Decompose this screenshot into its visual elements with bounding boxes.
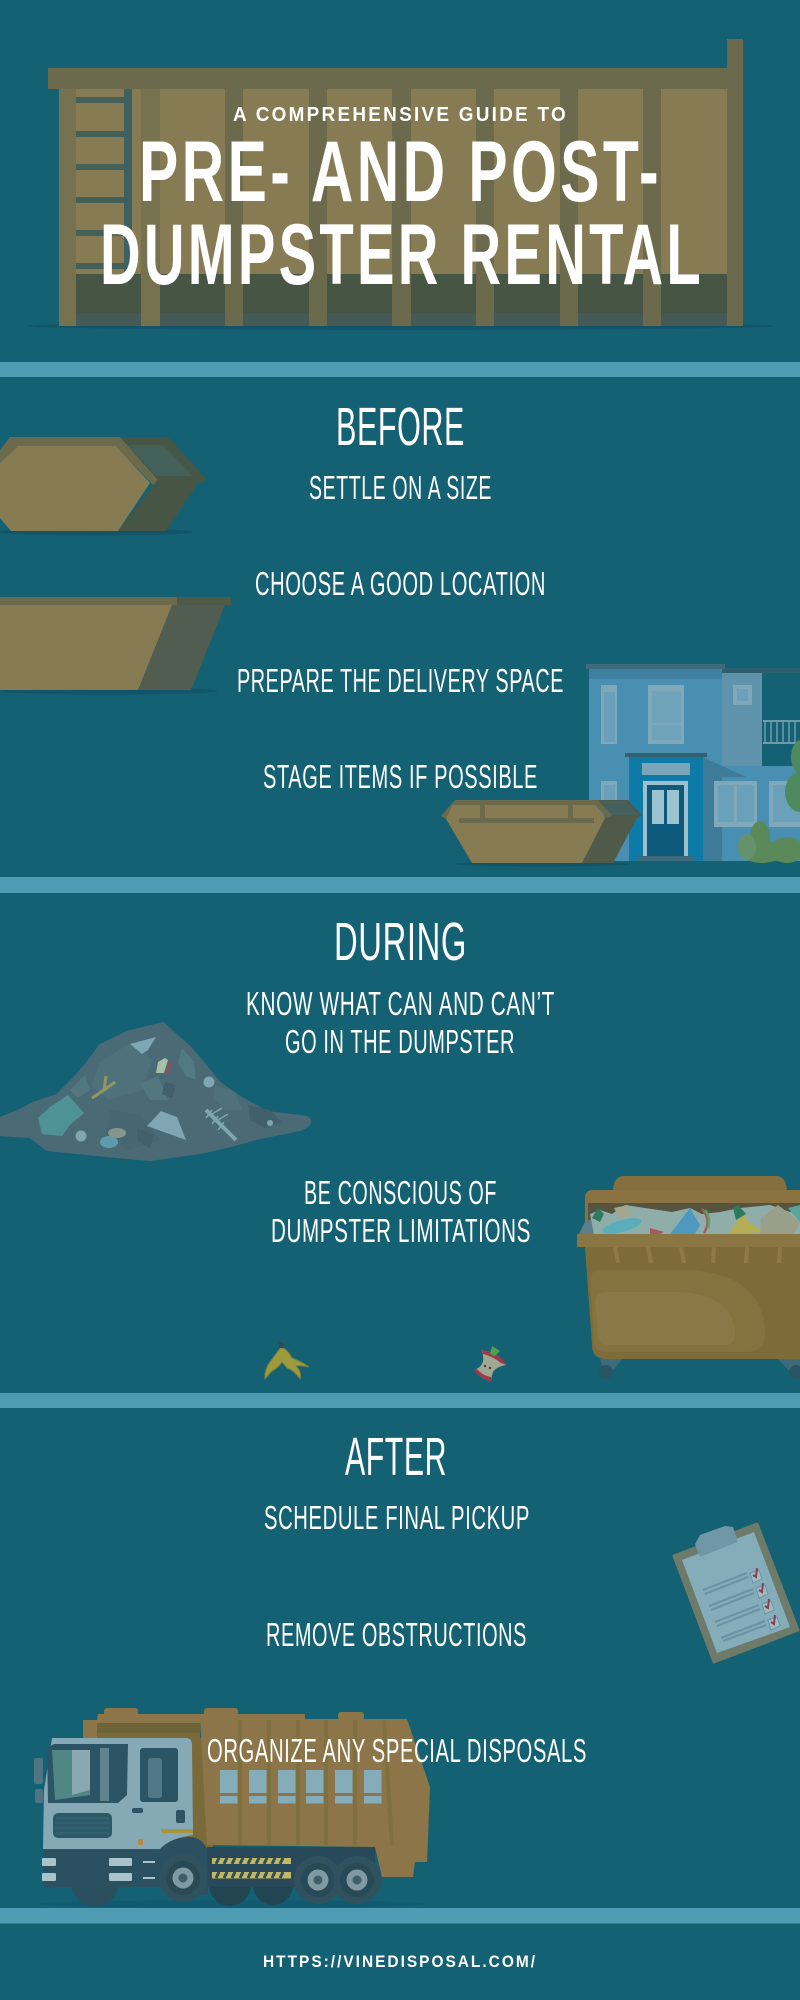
step: settle on a size: SETTLE ON A SIZE: [309, 470, 492, 507]
truck rear compactor: [83, 1708, 430, 1877]
icon: dumpster beside house: [441, 800, 642, 866]
truck wheels: [159, 1854, 381, 1904]
step: know what can go: [246, 986, 555, 1061]
house windows: [601, 685, 800, 827]
icon: garbage pile: [0, 1023, 310, 1160]
title block: A COMPREHENSIVE GUIDE TO: [233, 104, 568, 126]
panel: after: [34, 1427, 798, 1908]
truck windows: [220, 1770, 382, 1804]
checkboxes: [750, 1568, 780, 1630]
panel: during: [0, 912, 800, 1381]
step: know what can go: GO IN THE DUMPSTER: [285, 1024, 515, 1061]
icon: clipboard checklist: [674, 1524, 798, 1662]
step: know what can go: KNOW WHAT CAN AND CAN’T: [246, 986, 555, 1023]
step: schedule final pickup: SCHEDULE FINAL PICKUP: [264, 1500, 530, 1537]
front entry: [625, 753, 707, 861]
step: be conscious of limitations: DUMPSTER LIMITATIONS: [271, 1213, 531, 1250]
icon: full dumpster bin: [577, 1176, 800, 1379]
bushes: [738, 740, 800, 863]
icon: house: [586, 664, 800, 863]
hazard stripes: [212, 1858, 291, 1878]
icon: large skip dumpster: [0, 597, 231, 694]
icon: banana peel: [265, 1342, 309, 1379]
heading: after: AFTER: [345, 1427, 447, 1487]
step: be conscious of limitations: BE CONSCIOUS OF: [304, 1175, 497, 1212]
title block: [100, 104, 704, 303]
checklist lines: [703, 1573, 766, 1641]
truck lights: [42, 1858, 155, 1881]
balcony railing: [763, 720, 800, 744]
dumpster contents: [579, 1205, 800, 1237]
footer url: HTTPS://VINEDISPOSAL.COM/: [263, 1952, 537, 1971]
icon: apple core: [474, 1346, 506, 1381]
footer divider bar: [0, 1908, 800, 1924]
truck cab: [34, 1738, 193, 1849]
heading: before: BEFORE: [336, 397, 465, 457]
step: remove obstructions: REMOVE OBSTRUCTIONS: [266, 1617, 527, 1654]
step: stage items: STAGE ITEMS IF POSSIBLE: [263, 759, 538, 796]
step: prepare the delivery space: PREPARE THE DELIVERY SPACE: [237, 663, 564, 700]
panel: before: [0, 397, 800, 866]
hero dumpster illustration: [27, 39, 775, 330]
step: be conscious of limitations: [271, 1175, 531, 1250]
icon: truck: [34, 1708, 430, 1908]
step: choose a good location: CHOOSE A GOOD LOCATION: [255, 566, 546, 603]
wheels: [599, 1359, 800, 1379]
icon: small skip dumpster: [0, 437, 207, 536]
truck chassis: [43, 1837, 375, 1906]
divider bars: [0, 362, 800, 1408]
heading: during: DURING: [334, 912, 467, 972]
